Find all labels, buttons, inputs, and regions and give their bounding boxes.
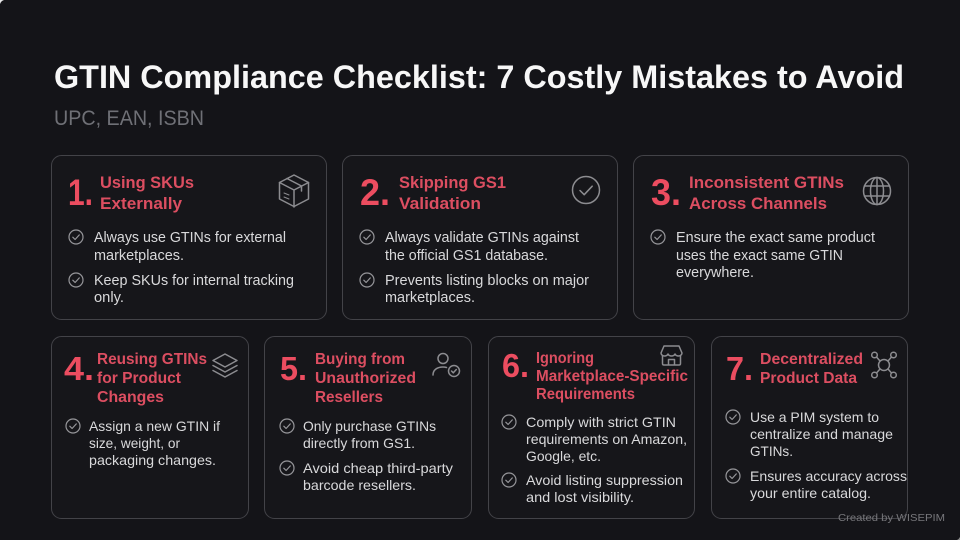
title: GTIN Compliance Checklist: 7 Costly Mistakes to Avoid: [54, 59, 904, 95]
bullet 1: use a PIM: Use a PIM system to: [750, 409, 879, 425]
bullet 1: use a PIM: GTINs.: [750, 443, 793, 459]
panel: mistake 4: [52, 336, 248, 518]
bullet 1: validate against GS1: the official GS1 database.: [385, 248, 548, 264]
number 2: 2.: [360, 172, 390, 213]
heading: inconsistent GTINs: Across Channels: [689, 194, 827, 213]
heading: marketplace-specific requirements: [536, 350, 688, 403]
icon: check circle: [572, 176, 600, 204]
number 6: 6.: [502, 347, 529, 384]
bullet: same GTIN everywhere: everywhere.: [676, 265, 754, 281]
heading: using SKUs externally: [100, 173, 194, 213]
heading: using SKUs externally: Externally: [100, 194, 183, 213]
bullet: same GTIN everywhere: [651, 230, 875, 281]
bullet 2: ensures accuracy: [726, 468, 907, 501]
bullet 1: comply with requirements: Comply with strict GTIN: [526, 414, 676, 430]
number 5: 5.: [280, 350, 307, 387]
bullet 2: avoid suppression: and lost visibility.: [526, 489, 634, 505]
heading: decentralized product data: Decentralized: [760, 351, 863, 368]
bullet 2: ensures accuracy: your entire catalog.: [750, 485, 871, 501]
bullet 2: avoid cheap resellers: [280, 460, 453, 493]
panel: mistake 1: [52, 156, 326, 320]
panel: mistake 3: [634, 156, 908, 320]
bullet 1: use a PIM: centralize and manage: [750, 426, 893, 442]
bullet 1: external marketplaces: marketplaces.: [94, 248, 184, 264]
bullet 1: external marketplaces: Always use GTINs for external: [94, 230, 286, 246]
heading: unauthorized resellers: Buying from: [315, 351, 405, 368]
icon: storefront: [661, 346, 682, 365]
heading: inconsistent GTINs: [689, 173, 844, 213]
number 7: 7.: [726, 350, 753, 387]
panel: mistake 6: [488, 336, 694, 518]
heading: reusing GTINs: Changes: [97, 389, 164, 406]
heading: decentralized product data: Product Data: [760, 370, 857, 387]
heading: marketplace-specific requirements: Requirements: [536, 386, 635, 403]
heading: marketplace-specific requirements: Marketplace-Specific: [536, 368, 688, 385]
bullet 2: avoid cheap resellers: barcode resellers.: [303, 477, 416, 493]
bullet 1: buy from GS1: [280, 418, 436, 451]
panel: mistake 2: [342, 156, 618, 320]
bullet 2: prevents listing blocks: Prevents listing blocks on major: [385, 273, 589, 289]
heading: using SKUs externally: Using SKUs: [100, 173, 194, 192]
bullet 2: prevents listing blocks: [360, 273, 589, 306]
watermark: Created by WISEPIM: [838, 512, 945, 524]
bullet 1: validate against GS1: Always validate GTINs against: [385, 230, 579, 246]
subtitle: UPC, EAN, ISBN: [54, 107, 204, 130]
bullet 2: internal tracking: [69, 273, 294, 306]
bullet: assign a new GTIN: size, weight, or: [89, 435, 180, 451]
heading: decentralized product data: [760, 351, 863, 387]
heading: reusing GTINs: for Product: [97, 370, 182, 387]
bullet 2: prevents listing blocks: marketplaces.: [385, 290, 475, 306]
bullet 1: buy from GS1: directly from GS1.: [303, 435, 415, 451]
icon: user check: [433, 354, 460, 376]
heading: skipping GS1 validation: Validation: [399, 194, 481, 213]
bullet 2: ensures accuracy: Ensures accuracy across: [750, 468, 907, 484]
number 1: 1.: [68, 172, 93, 213]
heading: reusing GTINs: [97, 351, 207, 406]
heading: unauthorized resellers: Resellers: [315, 389, 383, 406]
number 4: 4.: [64, 350, 94, 387]
bullet 2: internal tracking: Keep SKUs for internal tracking: [94, 273, 294, 289]
bullet: assign a new GTIN: Assign a new GTIN if: [89, 418, 220, 434]
bullet 1: comply with requirements: Google, etc.: [526, 448, 601, 464]
bullet: same GTIN everywhere: Ensure the exact same product: [676, 230, 875, 246]
bullet: assign a new GTIN: [66, 418, 220, 468]
icon: box: [280, 175, 308, 207]
panel: mistake 7: [712, 336, 908, 518]
bullet: same GTIN everywhere: uses the exact same GTIN: [676, 248, 843, 264]
heading: unauthorized resellers: Unauthorized: [315, 370, 416, 387]
bullet 1: external marketplaces: [69, 230, 286, 264]
bullet 2: avoid suppression: [502, 472, 683, 505]
bullet 2: avoid cheap resellers: Avoid cheap third-party: [303, 460, 453, 476]
panel: mistake 5: [264, 336, 472, 518]
bullet 1: validate against GS1: [360, 230, 579, 264]
bullet 2: internal tracking: only.: [94, 290, 124, 306]
bullet 1: use a PIM: [726, 409, 893, 459]
bullet 1: buy from GS1: Only purchase GTINs: [303, 418, 436, 434]
heading: skipping GS1 validation: [399, 173, 506, 213]
number 3: 3.: [651, 172, 681, 213]
bullet: assign a new GTIN: packaging changes.: [89, 452, 216, 468]
heading: skipping GS1 validation: Skipping GS1: [399, 173, 506, 192]
icon: globe: [864, 178, 890, 204]
heading: marketplace-specific requirements: Ignoring: [536, 350, 594, 367]
bullet 1: comply with requirements: requirements on Amazon,: [526, 431, 687, 447]
heading: unauthorized resellers: [315, 351, 416, 406]
icon: network: [872, 352, 896, 378]
icon: layers: [213, 354, 237, 377]
heading: reusing GTINs: Reusing GTINs: [97, 351, 207, 368]
bullet 2: avoid suppression: Avoid listing suppression: [526, 472, 683, 488]
heading: inconsistent GTINs: Inconsistent GTINs: [689, 173, 844, 192]
bullet 1: comply with requirements: [502, 414, 687, 464]
